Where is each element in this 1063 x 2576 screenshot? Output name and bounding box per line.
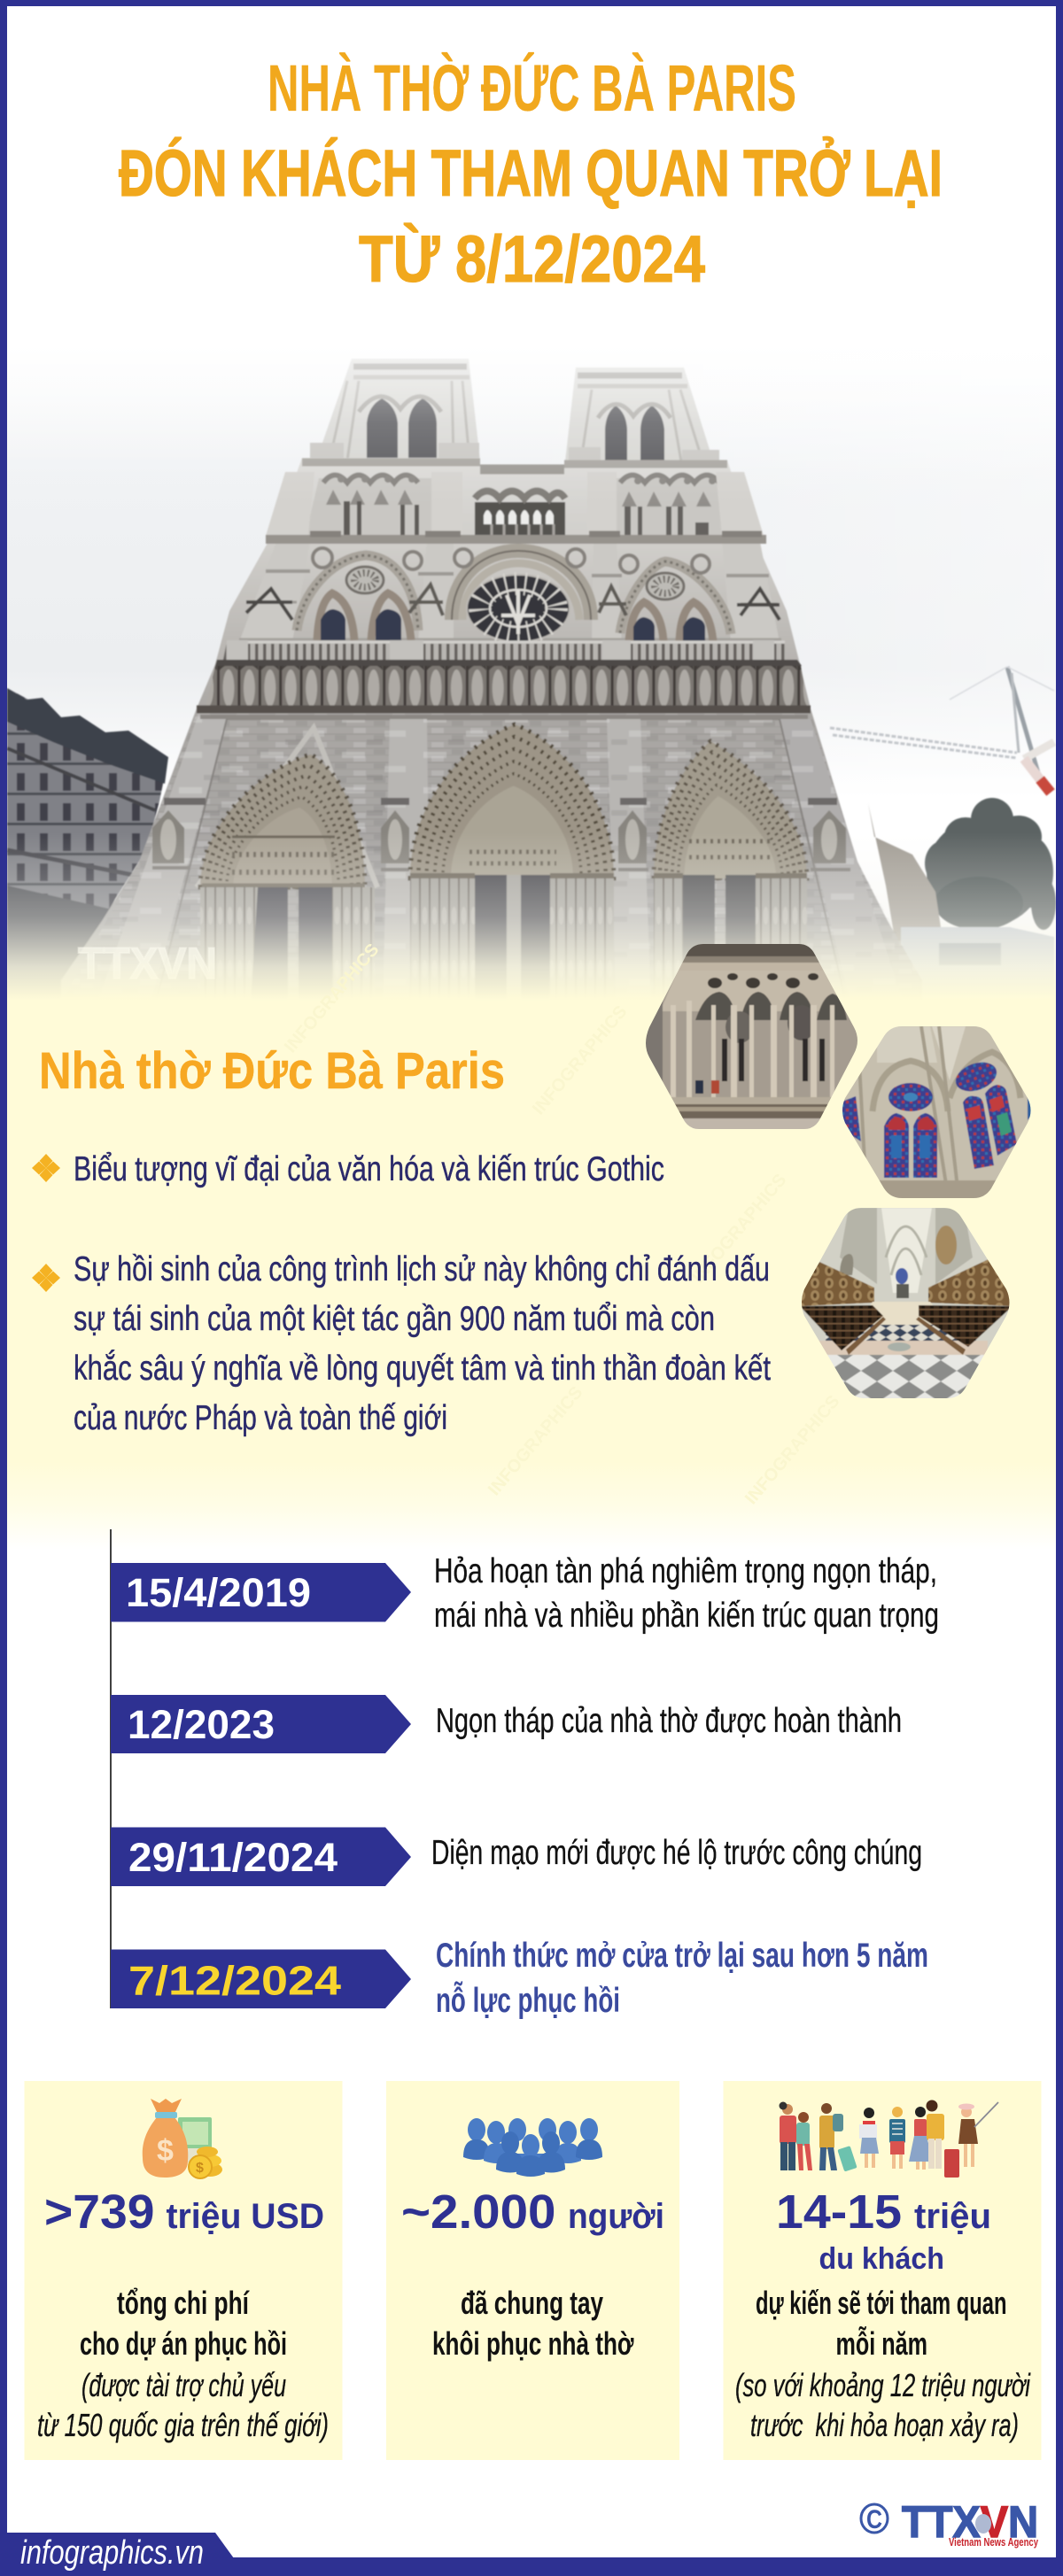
icon: diamond bullet	[32, 1264, 60, 1292]
stat: 14-15 triệu du khách: triệu	[914, 2197, 991, 2236]
crane	[830, 667, 1054, 793]
bullet 2	[32, 1250, 771, 1437]
faint watermarks: INFOGRAPHICS	[529, 1002, 631, 1118]
logo: TTXVN Vietnam News Agency: Vietnam News Agency	[949, 2536, 1038, 2549]
description	[37, 2285, 329, 2443]
description: khôi phục nhà thờ	[432, 2325, 634, 2362]
sky	[7, 337, 1056, 1010]
footer tab: infographics.vn: infographics.vn	[20, 2534, 204, 2572]
main body	[61, 458, 922, 1002]
timeline item 7/12/2024	[111, 1937, 928, 2020]
description: (được tài trợ chủ yếu	[81, 2367, 286, 2403]
panel: people card	[386, 2081, 679, 2460]
faint watermarks: INFOGRAPHICS	[688, 1171, 790, 1287]
icon: diamond bullet	[32, 1154, 60, 1182]
rose window	[467, 575, 570, 642]
description: cho dự án phục hồi	[80, 2325, 287, 2362]
description	[432, 2285, 634, 2362]
title: NHÀ THỜ ĐỨC BÀ PARIS	[268, 51, 796, 125]
stat: 14-15 triệu du khách: 14-15	[776, 2185, 902, 2239]
panel: cost card	[25, 2081, 342, 2460]
photo: Notre-Dame de Paris facade	[7, 337, 1056, 1010]
balustrade	[223, 640, 788, 660]
timeline item 7/12/2024: 7/12/2024	[128, 1957, 341, 2003]
timeline item 29/11/2024: 29/11/2024	[128, 1835, 338, 1880]
stat: >739 triệu USD	[44, 2185, 324, 2239]
stat: 14-15 triệu du khách	[776, 2185, 991, 2276]
icon: group of people	[463, 2118, 602, 2177]
upper gallery	[306, 475, 737, 538]
centre portal	[410, 724, 614, 1002]
bottom cream fade	[7, 832, 1056, 1002]
timeline item 12/2023: 12/2023	[128, 1702, 275, 1747]
timeline item 15/4/2019	[111, 1552, 939, 1635]
bullet 2: Sự hồi sinh của công trình lịch sử này không chỉ đánh dấu	[74, 1250, 770, 1288]
watermark TTXVN on the photo: TTXVN	[78, 939, 217, 988]
mid-level blind arches	[297, 551, 731, 634]
cathedral facade drawing	[7, 359, 1056, 1002]
hexagon photo: nave and choir	[802, 1208, 1010, 1398]
hexagon photo: stained glass	[837, 1023, 1036, 1200]
faint watermarks: INFOGRAPHICS	[741, 1392, 843, 1508]
small roses	[313, 548, 710, 600]
top white fade	[7, 337, 1056, 509]
towers	[310, 359, 719, 469]
description	[735, 2285, 1031, 2443]
timeline item 12/2023: Ngọn tháp của nhà thờ được hoàn thành	[436, 1702, 902, 1740]
logo: TTXVN Vietnam News Agency: C	[866, 2505, 882, 2534]
description: mỗi năm	[836, 2325, 927, 2362]
description: từ 150 quốc gia trên thế giới)	[37, 2407, 329, 2443]
stat: ~2.000 người: ~2.000	[401, 2185, 556, 2239]
timeline item 7/12/2024: nỗ lực phục hồi	[436, 1981, 620, 2020]
pinnacles	[246, 584, 780, 620]
icon: money bag: $	[157, 2134, 174, 2168]
right portal	[654, 741, 807, 1002]
panel: visitors card	[723, 2081, 1042, 2460]
left portal	[197, 728, 377, 1002]
stat: 14-15 triệu du khách: du khách	[819, 2242, 944, 2276]
faint watermarks: INFOGRAPHICS	[485, 1383, 586, 1499]
bullet 1: Biểu tượng vĩ đại của văn hóa và kiến trúc Gothic	[74, 1150, 664, 1188]
description: đã chung tay	[461, 2285, 603, 2321]
gallery of kings	[197, 660, 811, 717]
title: TỪ 8/12/2024	[359, 222, 705, 296]
title	[119, 51, 943, 296]
timeline	[111, 1529, 939, 2020]
section heading: Nhà thờ Đức Bà Paris	[39, 1042, 505, 1100]
bullet 2: sự tái sinh của một kiệt tác gần 900 năm tuổi mà còn	[74, 1300, 715, 1338]
stat: ~2.000 người: người	[568, 2197, 664, 2236]
icon: money bag	[143, 2099, 222, 2178]
stat: >739 triệu USD: triệu USD	[167, 2197, 324, 2236]
logo: TTXVN Vietnam News Agency: TTXVN	[902, 2497, 1038, 2547]
niches	[152, 810, 846, 863]
hexagon photo: Gothic arcade	[646, 944, 857, 1129]
timeline item 12/2023	[111, 1695, 902, 1753]
bullet 2: khắc sâu ý nghĩa về lòng quyết tâm và tinh thần đoàn kết	[74, 1350, 771, 1388]
stone courses	[61, 713, 922, 1002]
stat: ~2.000 người	[401, 2185, 664, 2239]
description: tổng chi phí	[117, 2285, 250, 2321]
faint watermarks: INFOGRAPHICS	[281, 940, 383, 1056]
bullet 2: của nước Pháp và toàn thế giới	[74, 1399, 447, 1437]
cornices	[239, 462, 781, 639]
tree and small house	[868, 798, 1056, 996]
buttresses	[239, 472, 780, 642]
timeline item 29/11/2024	[111, 1828, 922, 1886]
icon: tourists	[780, 2100, 998, 2178]
faint watermarks	[281, 940, 843, 1508]
side windows	[317, 593, 713, 642]
panel: cream background	[7, 1001, 1056, 1550]
stat: >739 triệu USD: >739	[44, 2185, 154, 2239]
lower buttresses	[97, 719, 904, 1002]
icon: money bag: $	[196, 2161, 204, 2176]
left Haussmann building	[7, 688, 168, 1001]
timeline item 15/4/2019: 15/4/2019	[126, 1570, 311, 1615]
